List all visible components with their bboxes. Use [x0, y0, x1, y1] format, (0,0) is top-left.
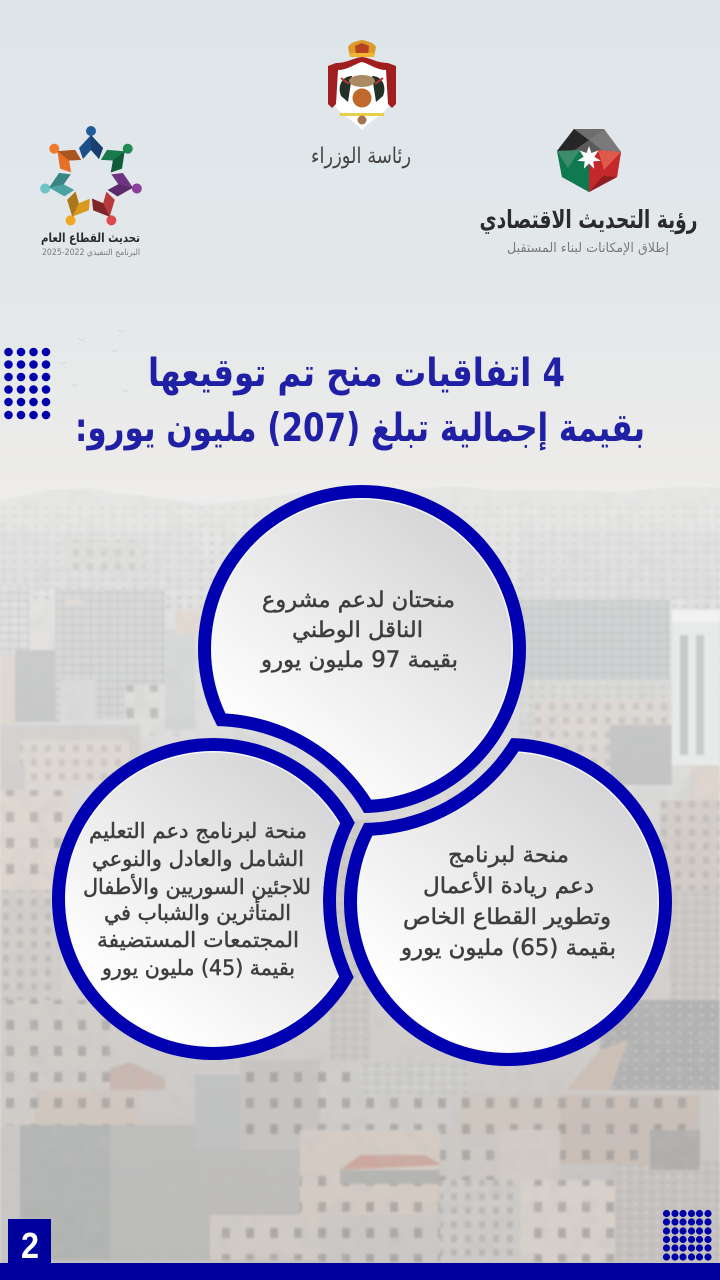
top grant text: [260, 588, 458, 673]
dots: bottom right: [663, 1210, 712, 1261]
right grant text: [400, 843, 616, 961]
emblem: coat of arms: [328, 40, 396, 130]
right grant text: منحة لبرنامج: [448, 843, 569, 868]
panel: right grant circle: [344, 738, 672, 1066]
left grant text: المتأثرين والشباب في: [104, 898, 291, 925]
page number: [8, 1219, 51, 1266]
vision slogan: إطلاق الإمكانات لبناء المستقبل: [507, 241, 669, 256]
footer bar: [0, 1263, 720, 1280]
top grant text: منحتان لدعم مشروع: [262, 588, 455, 613]
logo: economic modernization vision: [480, 129, 698, 256]
emblem: seven coloured figures: [38, 126, 144, 230]
left grant text: بقيمة (45) مليون يورو: [101, 956, 295, 980]
top grant text: الناقل الوطني: [292, 618, 423, 643]
left grant text: للاجئين السوريين والأطفال: [83, 874, 311, 899]
title: [75, 351, 645, 451]
left grant text: منحة لبرنامج دعم التعليم: [89, 819, 307, 844]
panel: top grant circle: [198, 485, 526, 813]
logo: public sector modernization: [38, 126, 144, 258]
left grant text: [83, 819, 311, 980]
ministry name: رئاسة الوزراء: [311, 144, 411, 169]
right grant text: دعم ريادة الأعمال: [423, 872, 594, 899]
dots: top left: [4, 348, 50, 419]
logo title: تحديث القطاع العام: [41, 230, 140, 246]
right grant text: وتطوير القطاع الخاص: [403, 905, 611, 930]
logo subtitle: البرنامج التنفيذي 2022-2025: [42, 248, 140, 258]
decorative birds: [60, 330, 128, 392]
panel: left grant circle: [52, 738, 374, 1060]
title line 2: بقيمة إجمالية تبلغ (207) مليون يورو:: [75, 406, 645, 451]
top grant text: بقيمة 97 مليون يورو: [260, 648, 458, 673]
left grant text: الشامل والعادل والنوعي: [92, 847, 304, 871]
left grant text: المجتمعات المستضيفة: [97, 928, 299, 952]
right grant text: بقيمة (65) مليون يورو: [400, 936, 616, 961]
title line 1: 4 اتفاقيات منح تم توقيعها: [148, 351, 565, 396]
logo: prime ministry: [311, 40, 411, 169]
page number: 2: [21, 1225, 39, 1266]
emblem: heptagon with star: [557, 129, 621, 192]
